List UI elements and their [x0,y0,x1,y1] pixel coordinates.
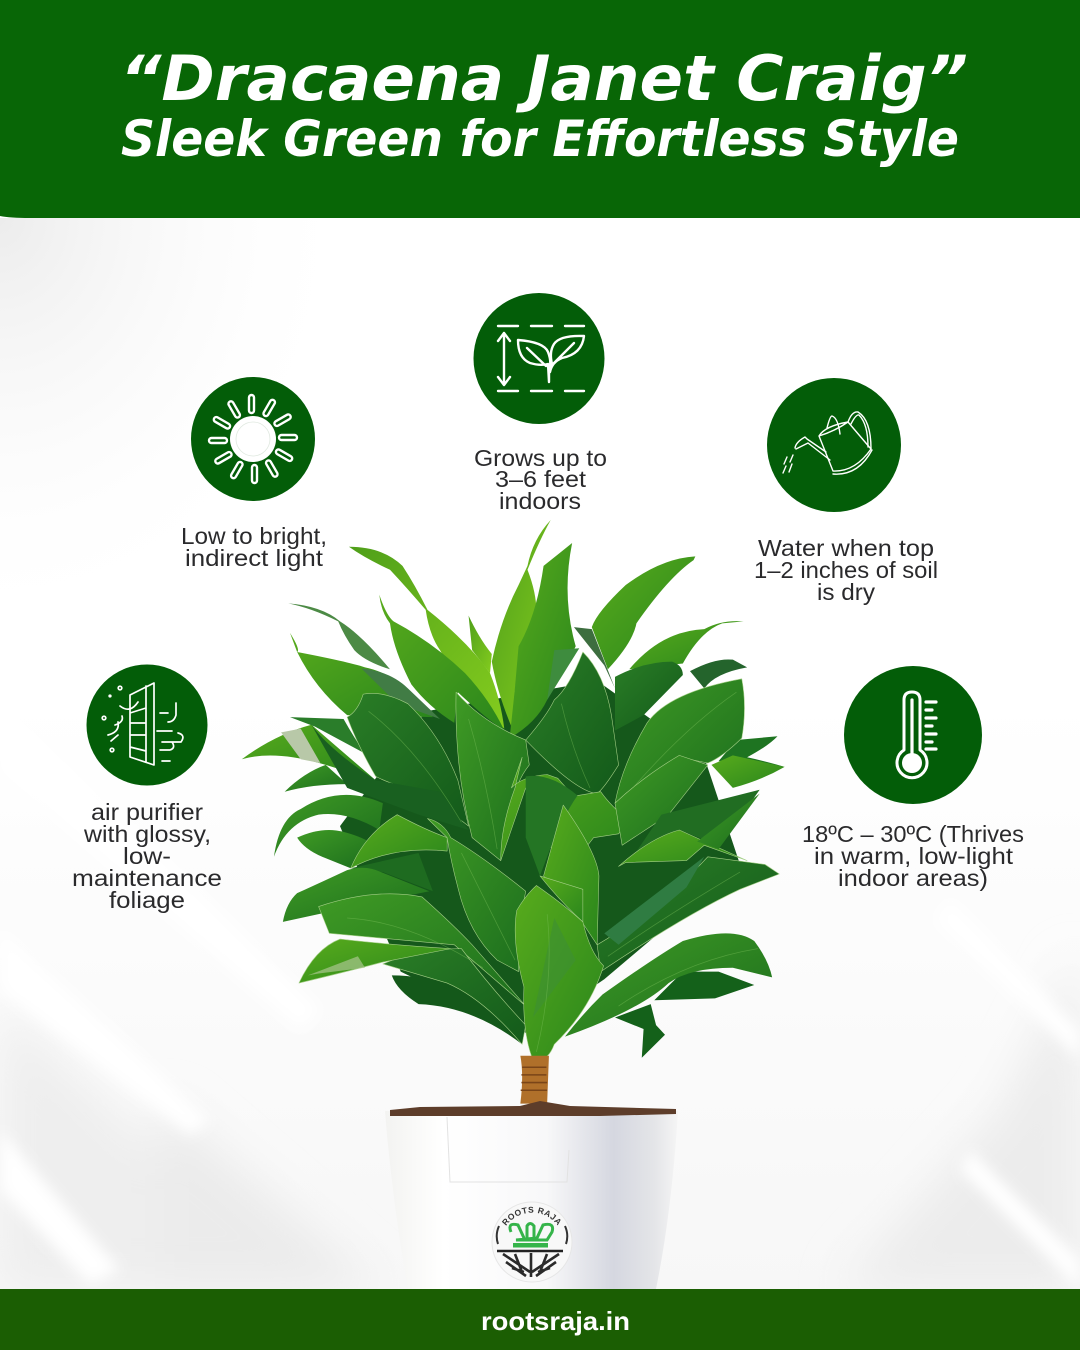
subtitle: Sleek Green for Effortless Style [121,110,959,168]
plant [242,520,785,1104]
logo sticker [492,1202,572,1282]
label: temperature: indoor areas) [838,865,988,891]
label: water [754,535,938,605]
label: air purifier: foliage [109,887,185,913]
label: height: Grows up to [474,445,607,471]
label: water: Water when top [758,535,934,561]
label: height [474,445,607,514]
label: temperature: 18ºC – 30ºC (Thrives [802,821,1024,847]
label: height: indoors [499,488,581,514]
logo sticker: ROOTS RAJA [502,1206,561,1226]
label: light: indirect light [185,545,324,571]
label: air purifier [72,799,222,913]
label: air purifier: with glossy, [83,821,211,847]
leaf veins [347,692,758,1052]
label: height: 3–6 feet [495,466,587,492]
label: water: is dry [817,579,875,605]
label: air purifier: maintenance [72,865,222,891]
pot [386,1101,676,1289]
title: “Dracaena Janet Craig” [120,42,968,115]
label: air purifier: air purifier [91,799,203,825]
header band [0,0,1080,218]
soil [390,1101,676,1116]
label: air purifier: low- [123,843,171,869]
icon: thermometer [844,666,982,804]
foliage [242,520,785,1060]
icon: air purifier [86,664,208,786]
label: temperature: in warm, low-light [814,843,1014,869]
label: light: Low to bright, [181,523,327,549]
label: light [181,523,327,571]
label: temperature [802,821,1024,891]
website: rootsraja.in [481,1306,630,1336]
icon: sun [191,377,315,501]
footer band [0,1289,1080,1350]
label: water: 1–2 inches of soil [754,557,938,583]
icon: watering can [767,378,901,512]
icon: height [474,293,604,424]
trunk [520,1056,549,1104]
background [0,218,1080,1290]
